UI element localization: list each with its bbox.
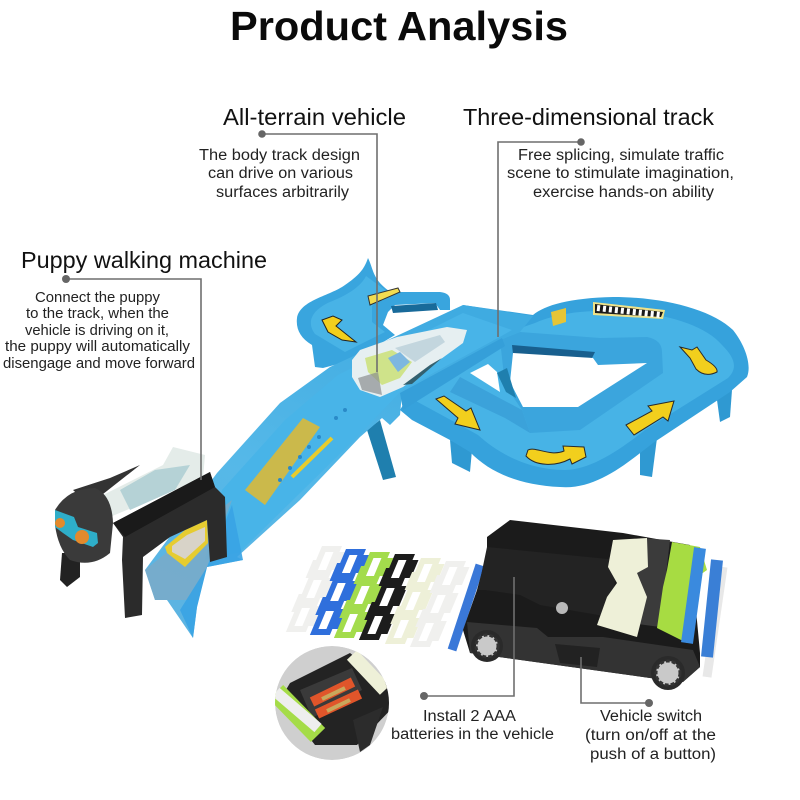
leader: three-dimensional track [498, 138, 585, 337]
text: puppy description: Connect the puppy [35, 290, 161, 306]
text: three-dimensional description: Free splicing, simulate traffic [518, 147, 724, 164]
vehicle body [463, 520, 723, 690]
leader: batteries [420, 577, 514, 700]
leader: vehicle switch [581, 657, 653, 707]
text: puppy description: the puppy will automatically [5, 339, 191, 355]
heading: puppy walking machine: Puppy walking machine [21, 247, 267, 273]
text: all-terrain description: surfaces arbitrarily [216, 184, 349, 201]
text: three-dimensional description [507, 147, 734, 201]
text: puppy description [3, 290, 195, 372]
leader: all-terrain vehicle [258, 130, 377, 372]
text: batteries note: Install 2 AAA [423, 708, 517, 725]
vehicle track links [283, 546, 480, 650]
leader: puppy walking machine [62, 275, 201, 480]
title: Product Analysis [230, 3, 568, 49]
text: all-terrain description: The body track design [199, 147, 360, 164]
text: vehicle switch note [585, 708, 716, 763]
text: all-terrain description: can drive on various [208, 165, 353, 182]
text: three-dimensional description: scene to stimulate imagination, [507, 165, 734, 182]
text: vehicle switch note: (turn on/off at the [585, 727, 716, 744]
heading: all-terrain vehicle: All-terrain vehicle [223, 104, 406, 130]
track stickers: yellow arrows [328, 314, 717, 464]
track: front leg [367, 420, 396, 480]
text: vehicle switch note: push of a button) [590, 746, 716, 763]
puppy walking machine [55, 447, 227, 618]
track: crossing strip and ramp [145, 305, 533, 638]
text: all-terrain description [199, 147, 360, 201]
text: vehicle switch note: Vehicle switch [600, 708, 702, 725]
heading: three-dimensional track: Three-dimensional track [463, 104, 715, 130]
toy car on the track [352, 327, 467, 397]
text: batteries note: batteries in the vehicle [391, 726, 554, 743]
text: puppy description: to the track, when the [26, 306, 169, 322]
inset: battery compartment [275, 646, 395, 760]
track: right loop [400, 297, 749, 487]
track: left loop [297, 258, 450, 368]
text: puppy description: disengage and move forward [3, 356, 195, 372]
text: three-dimensional description: exercise hands-on ability [533, 184, 714, 201]
text: puppy description: vehicle is driving on it, [25, 323, 169, 339]
text: batteries note [391, 708, 554, 743]
